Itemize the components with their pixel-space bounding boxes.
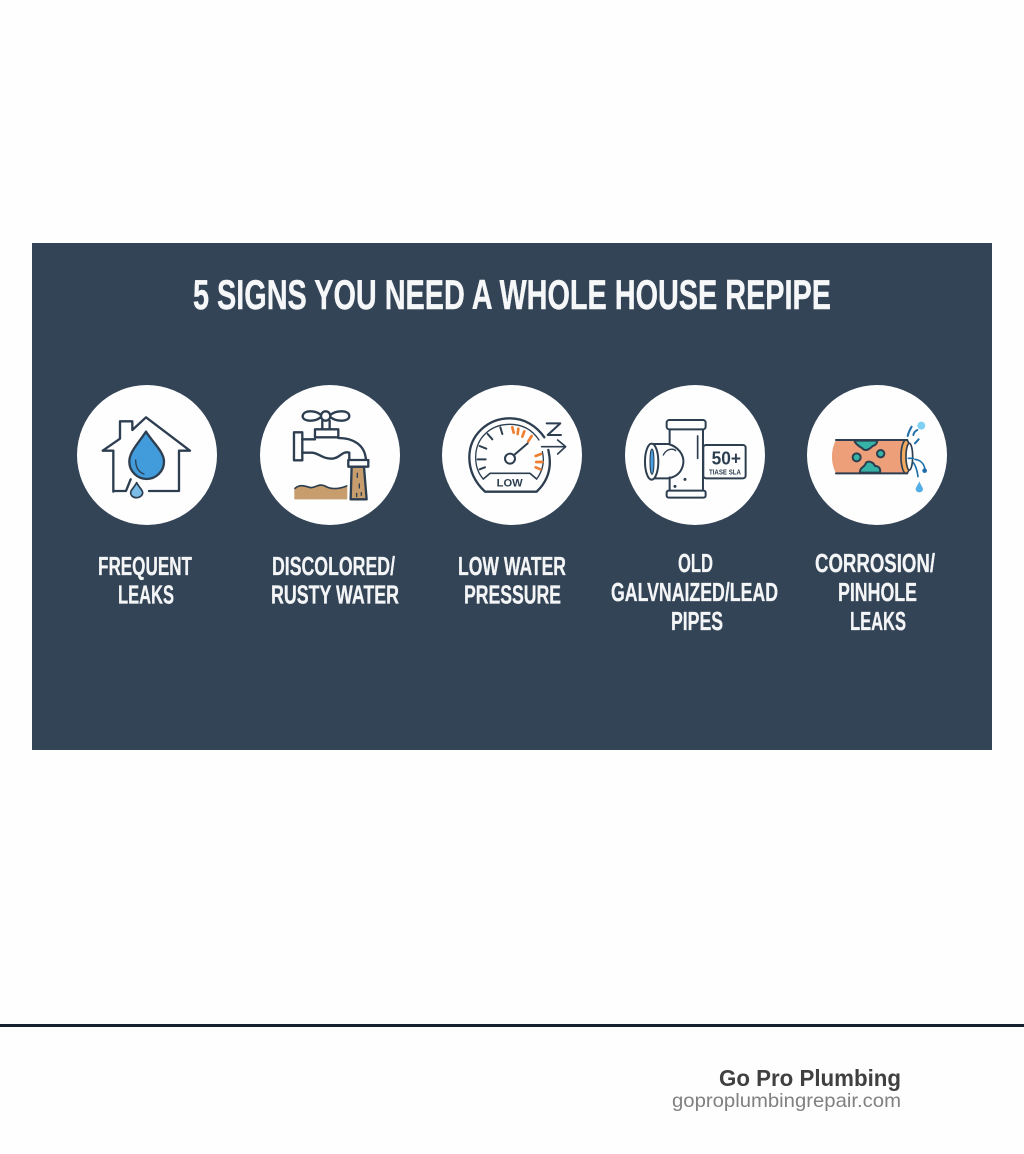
label: corrosion/pinhole leaks: CORROSION/ [815,548,935,578]
sign 3: low water pressure [442,385,582,610]
label: frequent leaks [98,551,192,610]
footer brand: Go Pro Plumbing [719,1065,901,1091]
icon: faucet with rusty water [294,411,368,499]
label: discolored water: RUSTY WATER [271,580,399,610]
label: corrosion/pinhole leaks: PINHOLE [838,577,917,607]
label: corrosion/pinhole leaks: LEAKS [850,606,906,636]
icon: house with water drop [103,417,190,498]
footer brand: goproplumbingrepair.com [672,1090,901,1112]
label: old galvanized/lead pipes [611,548,778,636]
icon: low pressure gauge [469,418,566,492]
icon circle: discolored water [260,385,400,525]
label: old galvanized/lead pipes: OLD [678,548,713,578]
label: low water pressure: PRESSURE [464,580,561,610]
label: corrosion/pinhole leaks [815,548,935,636]
label: low water pressure: LOW WATER [458,551,566,581]
icon: tee pipe with 50+ tag [645,420,746,498]
footer brand [672,1065,901,1112]
label: low water pressure [458,551,566,610]
footer rule [0,1024,1024,1027]
label: discolored water [271,551,399,610]
icon circle: old pipes [625,385,765,525]
label: frequent leaks: LEAKS [118,580,174,610]
label: old galvanized/lead pipes: PIPES [671,606,723,636]
icon circle: corrosion [807,385,947,525]
sign 1: frequent leaks [77,385,217,610]
label: old galvanized/lead pipes: GALVNAIZED/LEAD [611,577,778,607]
label: frequent leaks: FREQUENT [98,551,192,581]
label: discolored water: DISCOLORED/ [272,551,395,581]
sign 4: old galvanized/lead pipes [611,385,778,636]
icon circle: frequent leaks [77,385,217,525]
icon: tee pipe with 50+ tag: 50+ [712,447,741,468]
sign 2: discolored water [260,385,400,610]
panel: dark infographic background [32,243,992,750]
icon circle: low water pressure [442,385,582,525]
sign 5: corrosion/pinhole leaks [807,385,947,636]
icon: corroded pipe with spray [832,422,927,492]
icon: low pressure gauge: LOW [497,478,523,490]
icon: tee pipe with 50+ tag: TIASE SLA [709,467,742,476]
